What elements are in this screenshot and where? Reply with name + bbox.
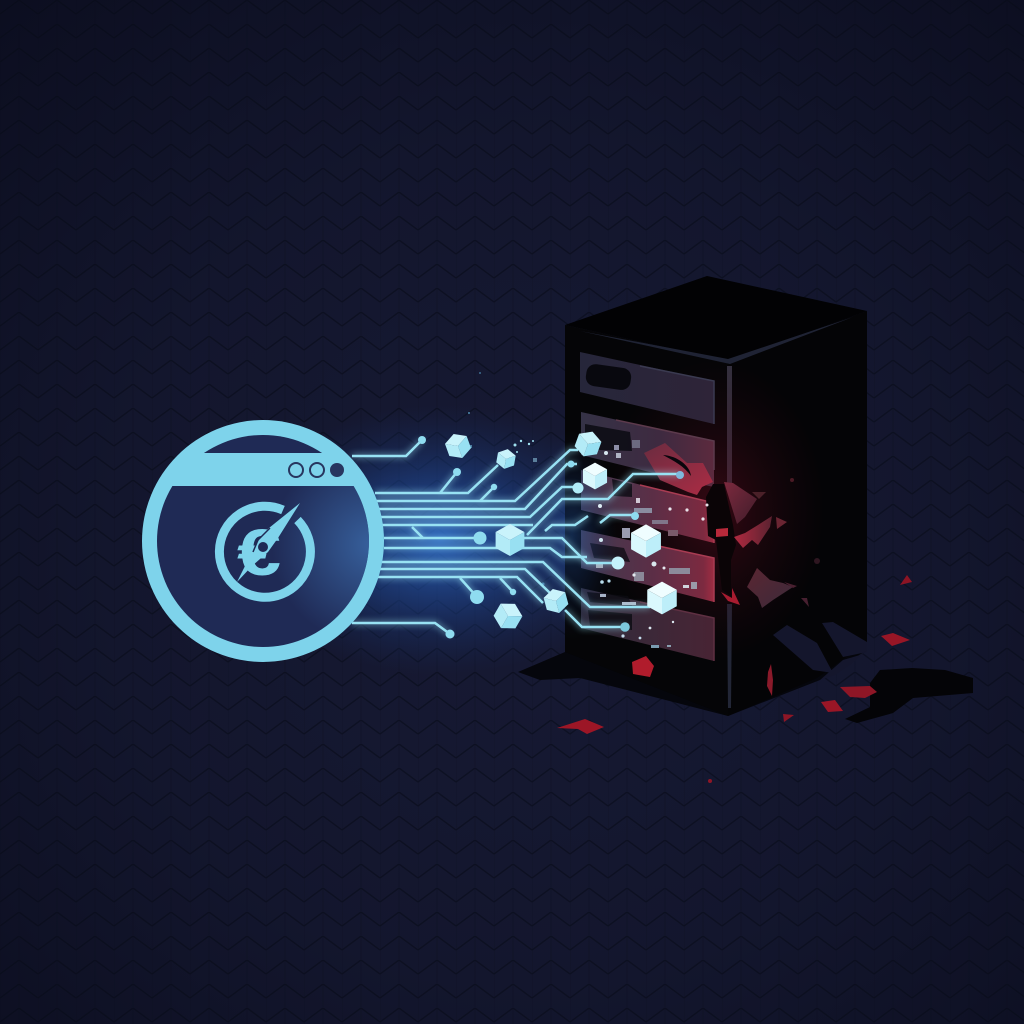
blue haze over server front — [527, 430, 617, 640]
euro gauge ring — [219, 506, 310, 597]
server front face — [565, 325, 728, 716]
black debris pile — [845, 668, 973, 723]
data particles — [468, 372, 708, 648]
cube: central — [496, 524, 524, 556]
cube: top right — [572, 428, 604, 460]
red glow inside server — [605, 360, 825, 660]
data cubes — [443, 428, 677, 634]
browser title bar — [172, 453, 354, 486]
cube: lower middle — [542, 586, 570, 616]
browser disc icon — [142, 420, 384, 662]
server panel 4 — [581, 530, 714, 602]
server top face — [565, 276, 867, 361]
trace end nodes — [418, 436, 684, 638]
glow under circuit traces — [352, 440, 680, 634]
cube: small round — [495, 448, 517, 470]
circuit traces — [352, 440, 680, 634]
cube: bottom — [490, 598, 526, 634]
server tower — [565, 276, 867, 716]
window buttons — [289, 463, 344, 477]
cube: upper left — [443, 430, 473, 462]
navy broken fragments at base — [773, 622, 867, 680]
euro symbol: € — [237, 516, 281, 589]
panel 2 torn red piece — [644, 443, 713, 495]
disc window — [157, 435, 369, 647]
server panel 1 with slot — [580, 352, 714, 424]
cube: right centre — [631, 524, 661, 558]
blue glow behind data stream — [240, 405, 640, 675]
broken shards on corner — [716, 478, 820, 696]
gauge needle — [237, 503, 300, 582]
disc inner glow — [284, 486, 369, 622]
black crack in corner — [706, 484, 736, 596]
top edge highlights — [580, 317, 853, 708]
server panel 5 — [581, 588, 714, 661]
server side face — [728, 311, 867, 716]
disc ring — [142, 420, 384, 662]
server panel 2 — [581, 412, 714, 487]
cube: second right — [583, 463, 607, 489]
server panel 3 — [581, 470, 714, 543]
red debris fragments — [557, 575, 912, 783]
cube: lower right — [647, 582, 677, 614]
server shadow — [518, 640, 867, 716]
